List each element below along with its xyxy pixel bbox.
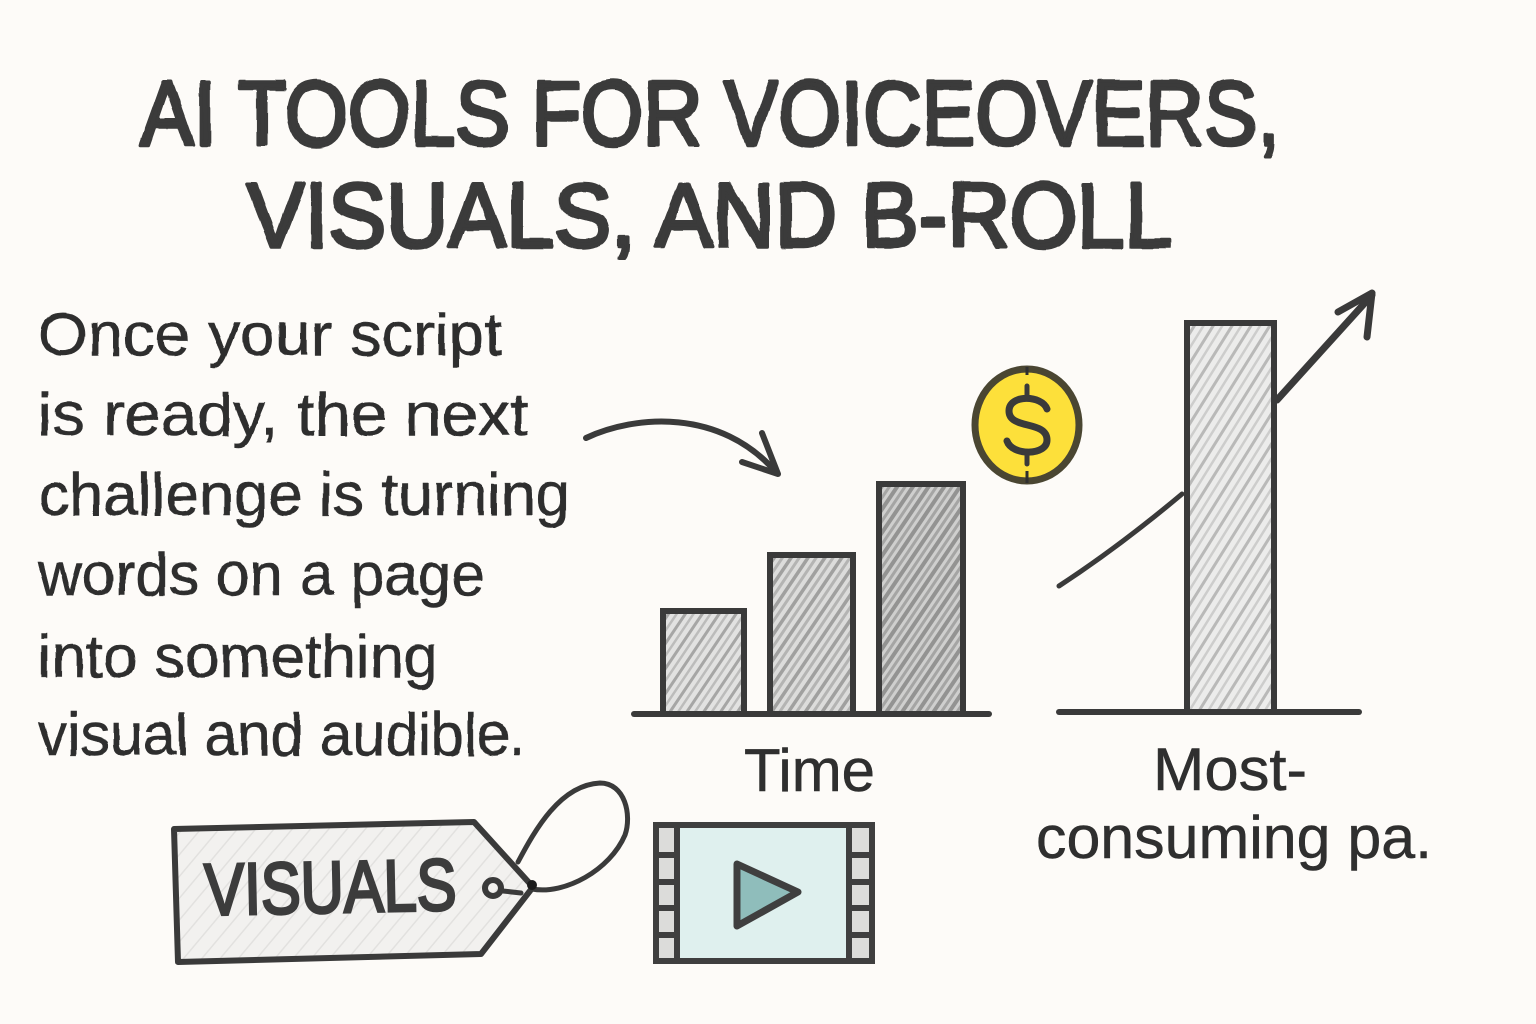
title: VISUALS, AND B-ROLL: [247, 165, 1173, 267]
play triangle: [737, 864, 798, 926]
intro text block: Once your script: [38, 301, 502, 368]
bar: small: [663, 611, 744, 714]
intro text block: into something: [38, 623, 438, 690]
bar: medium: [770, 555, 853, 714]
arrow: upward trend: [1277, 293, 1372, 400]
icon: visuals tag: [174, 783, 628, 962]
frame and perforations: [656, 825, 871, 961]
bar chart: time: [634, 484, 989, 714]
arrow: text to bar chart: [586, 422, 778, 474]
icon: dollar coin: [975, 367, 1079, 483]
bar chart: most time-consuming: [1059, 323, 1359, 712]
tag label: VISUALS: [204, 845, 457, 931]
tall bar: [1187, 323, 1274, 712]
intro text block: visual and audible.: [38, 701, 526, 768]
label: time: Time: [744, 737, 875, 804]
title: AI TOOLS FOR VOICEOVERS,: [140, 63, 1280, 165]
intro text block: [37, 301, 570, 768]
film strips: [658, 828, 677, 959]
title: [140, 63, 1280, 267]
tag knot: [527, 880, 537, 890]
axis: [634, 711, 989, 717]
intro text block: challenge is turning: [38, 461, 570, 528]
bar: tall: [879, 484, 963, 714]
intro text block: words on a page: [37, 541, 485, 608]
axis: [1059, 709, 1359, 715]
tag body: [174, 822, 533, 962]
label: most-consuming: consuming pa.: [1036, 804, 1432, 871]
tag string back: [518, 783, 628, 890]
intro text block: is ready, the next: [38, 381, 528, 448]
growth line: [1059, 494, 1182, 586]
tag hole: [485, 880, 521, 896]
screen: [677, 826, 849, 960]
label: most-consuming: [1036, 736, 1432, 871]
icon: video film strip: [656, 825, 872, 961]
label: most-consuming: Most-: [1153, 736, 1307, 803]
